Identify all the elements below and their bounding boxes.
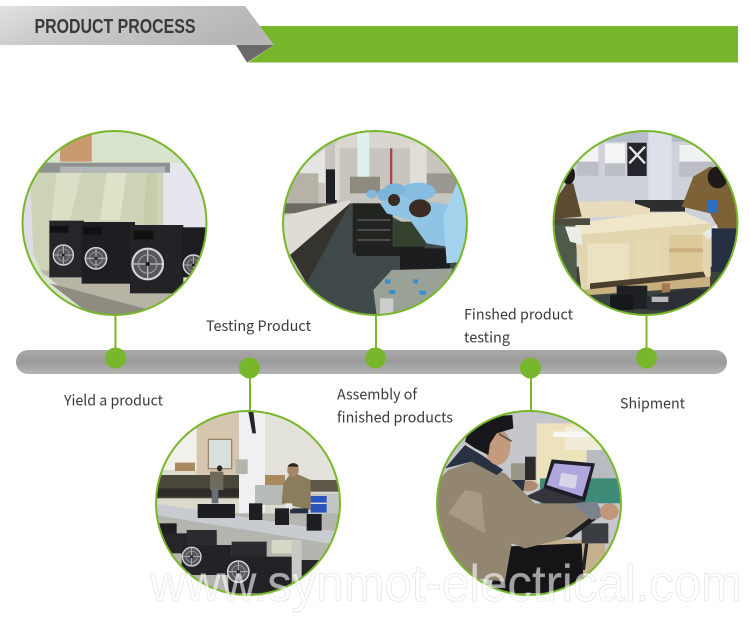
label: finished product testing: testing xyxy=(464,326,510,348)
label: assembly of finished products: finished products xyxy=(337,406,453,428)
label: finished product testing xyxy=(464,304,574,348)
label: finished product testing: Finshed product xyxy=(464,304,574,324)
label: assembly of finished products: Assembly of xyxy=(337,384,418,404)
ring xyxy=(22,131,206,315)
label: testing product: Testing Product xyxy=(206,315,312,336)
timeline dots xyxy=(105,348,657,378)
label: yield a product: Yield a product xyxy=(63,390,164,410)
photo: technician at laptop xyxy=(436,410,622,596)
timeline bar xyxy=(16,350,727,374)
ring xyxy=(283,131,467,315)
ring xyxy=(156,411,340,595)
green band xyxy=(248,26,738,62)
connector: testing xyxy=(249,372,251,412)
photo: testing workshop xyxy=(155,410,341,596)
ring xyxy=(437,411,621,595)
connector: shipment xyxy=(646,314,648,354)
ring xyxy=(554,131,738,315)
connector: yield a product xyxy=(114,314,116,354)
photo: assembly line xyxy=(282,130,468,316)
grey ribbon xyxy=(0,6,274,45)
title: PRODUCT PROCESS xyxy=(34,15,196,38)
connector: assembly xyxy=(375,314,377,354)
ribbon fold xyxy=(236,45,274,62)
label: assembly of finished products xyxy=(337,384,453,428)
photo: motors on shelf xyxy=(22,130,208,316)
photo: wooden crate xyxy=(552,130,738,316)
label: shipment: Shipment xyxy=(620,392,686,414)
connector: finished testing xyxy=(530,372,532,412)
header banner xyxy=(0,6,738,62)
